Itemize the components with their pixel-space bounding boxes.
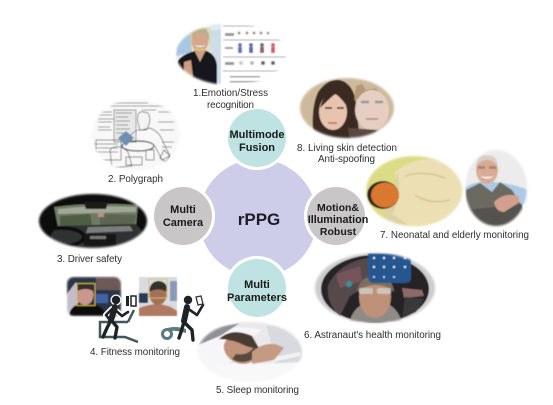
label: emotion and stress recognition: recognition — [207, 100, 254, 111]
label: driver safety: 3. Driver safety — [57, 254, 122, 265]
node: Multi Parameters — [227, 259, 287, 317]
node: Motion and Illumination Robust: Illumination — [308, 214, 368, 226]
label: emotion and stress recognition — [193, 88, 268, 111]
label: sleep monitoring: 5. Sleep monitoring — [216, 385, 299, 396]
photo: driver safety — [36, 192, 150, 250]
node: Motion and Illumination Robust: Motion& — [317, 202, 359, 214]
photo: fitness face right — [139, 277, 177, 316]
photo: sleep monitoring — [198, 322, 303, 370]
node: Motion and Illumination Robust — [307, 187, 368, 245]
label: astronaut health monitoring: 6. Astranaut's health monitoring — [304, 330, 441, 341]
node: Multimode Fusion — [228, 109, 286, 167]
label: living skin detection and anti-spoofing: 8. Living skin detection — [297, 143, 397, 154]
node: Multi Parameters: Multi — [244, 279, 270, 291]
photo: fitness face left — [66, 276, 122, 317]
node: Multi Camera — [154, 187, 212, 245]
icon: elliptical trainer user — [162, 296, 203, 340]
node: Motion and Illumination Robust: Robust — [320, 226, 357, 238]
photo: emotion and stress recognition — [175, 22, 290, 86]
label: living skin detection and anti-spoofing: Anti-spoofing — [318, 154, 375, 165]
photo: neonatal monitoring — [365, 155, 465, 228]
photo: elderly monitoring — [463, 148, 529, 230]
photo: astronaut health monitoring — [312, 250, 440, 326]
node: Multi Parameters: Parameters — [227, 292, 287, 304]
label: fitness monitoring: 4. Fitness monitoring — [90, 347, 180, 358]
label: neonatal and elderly monitoring: 7. Neonatal and elderly monitoring — [380, 230, 529, 241]
central rPPG hub — [151, 106, 368, 320]
node: Multi Camera: Camera — [163, 217, 204, 229]
label: living skin detection and anti-spoofing — [297, 143, 397, 165]
label: polygraph: 2. Polygraph — [108, 174, 163, 185]
node: Multimode Fusion: Multimode — [230, 129, 284, 141]
icon: treadmill runner — [100, 294, 138, 342]
photo: living skin detection — [298, 76, 396, 140]
photo: polygraph sketch — [94, 102, 175, 168]
central rPPG hub: rPPG — [238, 210, 280, 229]
node: Multimode Fusion: Fusion — [239, 142, 275, 154]
node: Multi Camera: Multi — [170, 204, 196, 216]
label: emotion and stress recognition: 1.Emotion/Stress — [193, 88, 268, 99]
